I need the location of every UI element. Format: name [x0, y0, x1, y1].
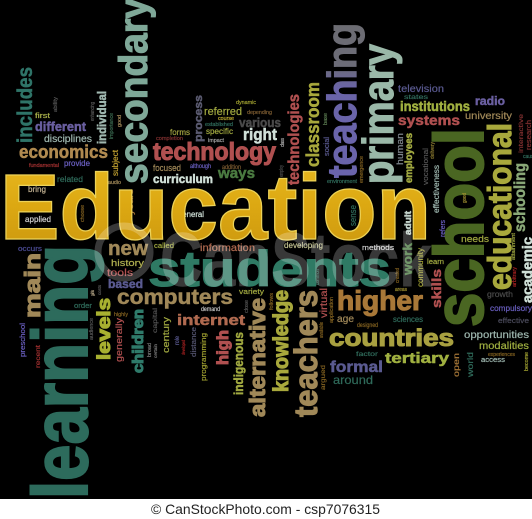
minor keywords, vertical: social: [324, 137, 331, 156]
minor keywords, horizontal: order: [74, 301, 93, 310]
minor keywords, vertical: choose: [80, 205, 86, 222]
minor keywords, vertical: good: [117, 115, 123, 127]
minor keywords, horizontal: disciplines: [44, 134, 92, 145]
minor keywords, vertical: vocational: [421, 148, 430, 185]
minor keywords, vertical: adult: [403, 211, 413, 235]
minor keywords, vertical: interactive: [518, 113, 525, 153]
minor keywords, horizontal: related: [57, 175, 83, 184]
main title word: Education: Education: [0, 155, 431, 259]
minor keywords, horizontal: various: [239, 115, 281, 130]
minor keywords, vertical: children: [130, 309, 147, 373]
minor keywords, horizontal: highly: [114, 312, 128, 318]
minor keywords, horizontal: [18, 84, 532, 387]
minor keywords, horizontal: access: [481, 357, 506, 364]
minor keywords, vertical: sense: [348, 205, 358, 226]
minor keywords, vertical: schooling: [512, 163, 529, 232]
word: higher: higher: [337, 285, 423, 316]
minor keywords, horizontal: completion: [156, 136, 183, 142]
minor keywords, vertical: distance: [191, 327, 198, 357]
minor keywords, horizontal: opportunities: [464, 329, 529, 341]
minor keywords, horizontal: history: [111, 258, 145, 268]
word: includes: includes: [14, 67, 37, 143]
minor keywords, horizontal: forms: [170, 128, 190, 137]
word: technologies: technologies: [286, 94, 303, 185]
minor keywords, horizontal: areas: [395, 287, 407, 293]
minor keywords, vertical: process: [193, 95, 205, 142]
minor keywords, vertical: virtual: [319, 288, 330, 318]
word: knowledge: knowledge: [270, 290, 293, 392]
word: teachers: teachers: [288, 290, 324, 417]
minor keywords, vertical: good: [462, 193, 468, 203]
minor keywords, horizontal: environment: [327, 179, 358, 185]
minor keywords, vertical: preschool: [20, 323, 27, 357]
minor keywords, vertical: girls: [90, 289, 95, 296]
footer credit text: © CanStockPhoto.com - csp7076315: [151, 501, 380, 517]
minor keywords, horizontal: general: [178, 210, 204, 219]
minor keywords, vertical: available: [319, 322, 325, 338]
word: alternative: alternative: [245, 298, 270, 417]
minor keywords, horizontal: sciences: [393, 315, 423, 324]
minor keywords, horizontal: called: [154, 241, 174, 250]
word: main: main: [20, 253, 45, 318]
minor keywords, horizontal: referred: [204, 106, 242, 118]
minor keywords, horizontal: based: [108, 277, 143, 291]
minor keywords, horizontal: established: [205, 122, 233, 128]
minor keywords, vertical: developed: [181, 340, 186, 355]
minor keywords, horizontal: age: [337, 314, 354, 325]
minor keywords, vertical: recent: [36, 345, 42, 368]
minor keywords, vertical: century: [161, 316, 171, 353]
minor keywords, horizontal: information: [200, 243, 255, 254]
minor keywords, horizontal: radio: [475, 94, 505, 108]
minor keywords, horizontal: new: [108, 238, 148, 260]
minor keywords, horizontal: demand: [201, 307, 220, 313]
word: school: school: [420, 128, 498, 327]
minor keywords, vertical: certain: [153, 343, 158, 358]
minor keywords, vertical: subject: [111, 149, 120, 176]
minor keywords, horizontal: university: [465, 111, 512, 122]
minor keywords, vertical: capital: [152, 307, 159, 333]
minor keywords, vertical: enhancing: [90, 102, 96, 121]
minor keywords, vertical: community: [416, 248, 425, 287]
minor keywords, horizontal: first: [35, 113, 50, 120]
minor keywords, horizontal: ways: [217, 165, 255, 182]
minor keywords, vertical: employees: [404, 133, 415, 183]
minor keywords, horizontal: developing: [284, 240, 323, 250]
minor keywords, vertical: role: [175, 335, 181, 345]
minor keywords, horizontal: audio: [108, 180, 121, 186]
minor keywords, horizontal: experiences: [488, 352, 515, 358]
minor keywords, horizontal: internet: [177, 312, 245, 329]
word: technology: technology: [153, 138, 276, 166]
minor keywords, vertical: arbitrary: [512, 266, 518, 287]
minor keywords, horizontal: states: [404, 94, 429, 101]
minor keywords, horizontal: growth: [487, 289, 513, 299]
minor keywords, vertical: become: [524, 352, 530, 371]
word: economics: economics: [19, 142, 108, 162]
minor keywords, horizontal: around: [333, 373, 373, 387]
minor keywords, horizontal: depending: [247, 110, 272, 116]
word: learning: learning: [16, 245, 104, 499]
minor keywords, horizontal: methods: [362, 243, 394, 252]
minor keywords, horizontal: television: [398, 84, 444, 95]
minor keywords, horizontal: tertiary: [385, 350, 450, 367]
minor keywords, horizontal: right: [243, 125, 277, 144]
minor keywords, vertical: effectiveness: [432, 165, 441, 213]
minor keywords, vertical: years: [125, 188, 135, 215]
minor keywords, vertical: employ: [279, 165, 285, 177]
minor keywords, vertical: generally: [114, 317, 124, 362]
minor keywords, vertical: refers: [440, 220, 447, 237]
minor keywords, horizontal: although: [190, 164, 211, 170]
minor keywords, horizontal: needs: [461, 234, 489, 245]
minor keywords, vertical: broad: [147, 343, 153, 357]
minor keywords, vertical: emergence: [359, 156, 365, 183]
minor keywords, horizontal: curriculum: [153, 172, 213, 186]
minor keywords, horizontal: course: [218, 116, 234, 122]
watermark: stock photo mark: CanStock: [160, 218, 433, 303]
minor keywords, horizontal: tools: [107, 268, 133, 279]
minor keywords, horizontal: addition: [222, 165, 241, 171]
minor keywords, horizontal: factor: [356, 351, 379, 358]
minor keywords, vertical: costs: [97, 284, 102, 295]
minor keywords, vertical: world: [466, 352, 475, 378]
minor keywords, vertical: delivery: [430, 142, 436, 159]
minor keywords, vertical: indigenous: [231, 332, 246, 395]
word: students: students: [148, 241, 391, 297]
minor keywords, horizontal: systems: [398, 112, 460, 128]
minor keywords, vertical: class: [280, 138, 286, 147]
word: primary: primary: [354, 44, 403, 184]
minor keywords, vertical: base: [323, 113, 329, 125]
minor keywords, vertical: application: [329, 297, 335, 323]
minor keywords, vertical: skills: [429, 269, 444, 308]
word: teaching: teaching: [319, 23, 365, 178]
minor keywords, vertical: work: [400, 242, 415, 276]
minor keywords, vertical: individual: [95, 91, 109, 144]
minor keywords, horizontal: designed: [357, 323, 378, 329]
minor keywords, horizontal: specific: [206, 126, 234, 136]
minor keywords, vertical: programming: [199, 333, 208, 381]
minor keywords, horizontal: focused: [153, 163, 181, 173]
minor keywords, vertical: close: [244, 300, 250, 313]
minor keywords, horizontal: applied: [25, 214, 51, 224]
minor keywords, vertical: high: [215, 330, 232, 365]
minor keywords, horizontal: effective: [498, 316, 529, 325]
word: classroom: classroom: [303, 82, 323, 167]
minor keywords, vertical: argued: [321, 365, 327, 390]
minor keywords, horizontal: modalities: [479, 341, 529, 352]
minor keywords, horizontal: institutions: [400, 98, 470, 114]
minor keywords, horizontal: bring: [28, 185, 46, 194]
word: educational: educational: [481, 123, 518, 290]
minor keywords, vertical: human: [395, 133, 405, 165]
minor keywords, vertical: common: [315, 269, 321, 285]
minor keywords, horizontal: fundamental: [29, 163, 59, 169]
word: countries: countries: [329, 325, 454, 352]
minor keywords, vertical: importance: [109, 113, 115, 139]
minor keywords, vertical: affects: [278, 201, 284, 220]
minor keywords, vertical: levels: [94, 298, 114, 360]
minor keywords, horizontal: variety: [239, 287, 264, 296]
minor keywords, vertical: ability: [53, 96, 59, 112]
minor keywords, horizontal: dynamic: [236, 100, 256, 106]
minor keywords, vertical: [20, 91, 532, 395]
footer strip: [0, 499, 532, 519]
minor keywords, vertical: audience: [89, 318, 95, 340]
minor keywords, vertical: open: [452, 353, 461, 377]
minor keywords, vertical: follows: [269, 292, 275, 310]
minor keywords, horizontal: occurs: [18, 244, 42, 253]
minor keywords, vertical: attainment: [511, 232, 517, 260]
watermark: stock photo mark: [98, 218, 433, 303]
minor keywords, horizontal: learn: [427, 259, 444, 266]
minor keywords, horizontal: different: [35, 119, 87, 134]
minor keywords, vertical: created: [395, 268, 401, 283]
minor keywords, horizontal: formal: [330, 359, 383, 376]
minor keywords, horizontal: provide: [64, 159, 91, 168]
minor keywords, horizontal: impact: [208, 138, 224, 144]
word: computers: computers: [117, 286, 233, 309]
